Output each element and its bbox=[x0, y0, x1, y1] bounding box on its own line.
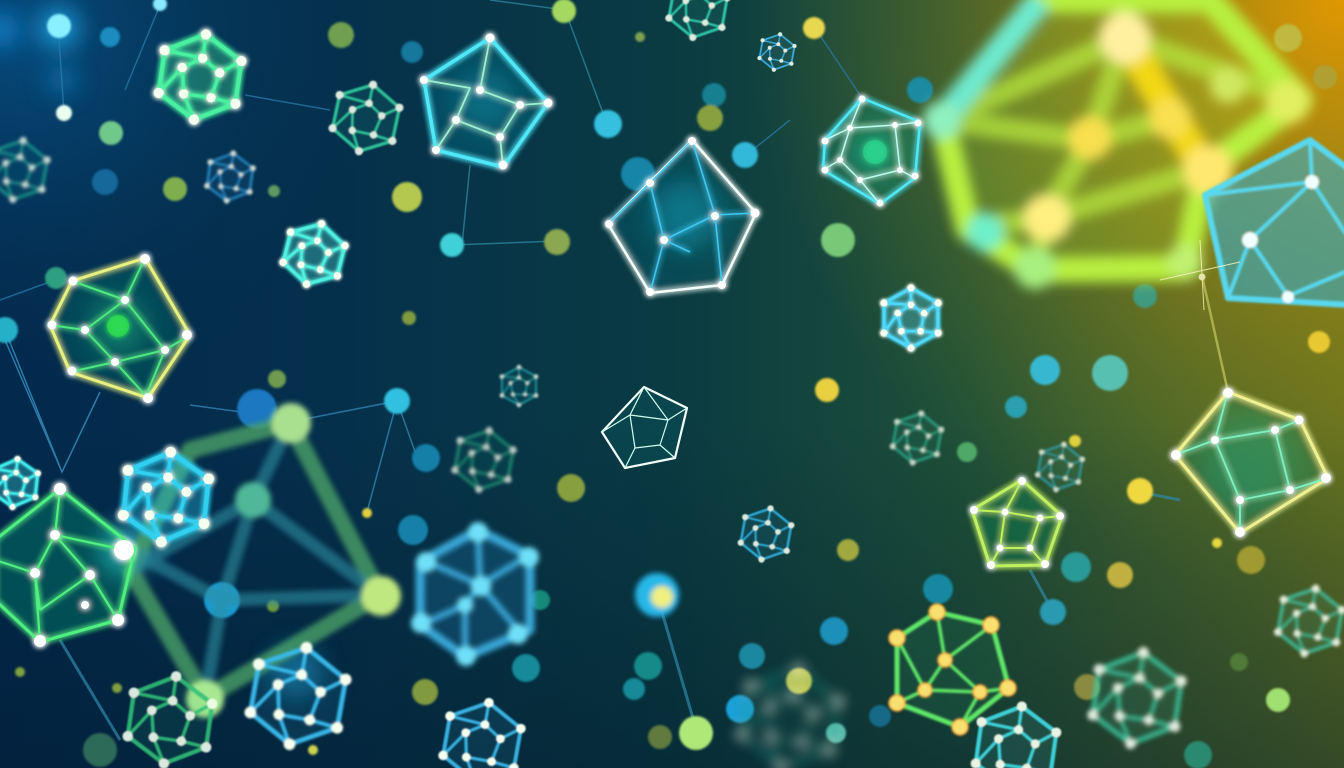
polyhedron: cyan right of centre bbox=[822, 96, 922, 206]
polyhedron: yellow green left bbox=[48, 254, 192, 403]
polyhedron: cyan blurred right edge bbox=[1205, 140, 1344, 305]
polyhedron: green lower left bbox=[0, 483, 135, 647]
glowing orb bbox=[635, 573, 679, 617]
polyhedron: cyan top centre bbox=[420, 34, 552, 170]
polyhedron: large blurred top right bbox=[923, 0, 1310, 289]
polyhedron: blue blurred lower centre bbox=[411, 522, 539, 666]
polyhedron: large blurred lower left bbox=[130, 403, 401, 718]
polyhedron: yellow right bbox=[1171, 388, 1331, 537]
polyhedron: white centre bbox=[605, 137, 760, 296]
lens sparkle bbox=[1160, 240, 1240, 310]
polyhedron: white outline small centre bbox=[602, 387, 687, 468]
polyhedron: yellow green small right bbox=[970, 477, 1064, 569]
polyhedron: green with orange nodes bbox=[889, 604, 1016, 735]
